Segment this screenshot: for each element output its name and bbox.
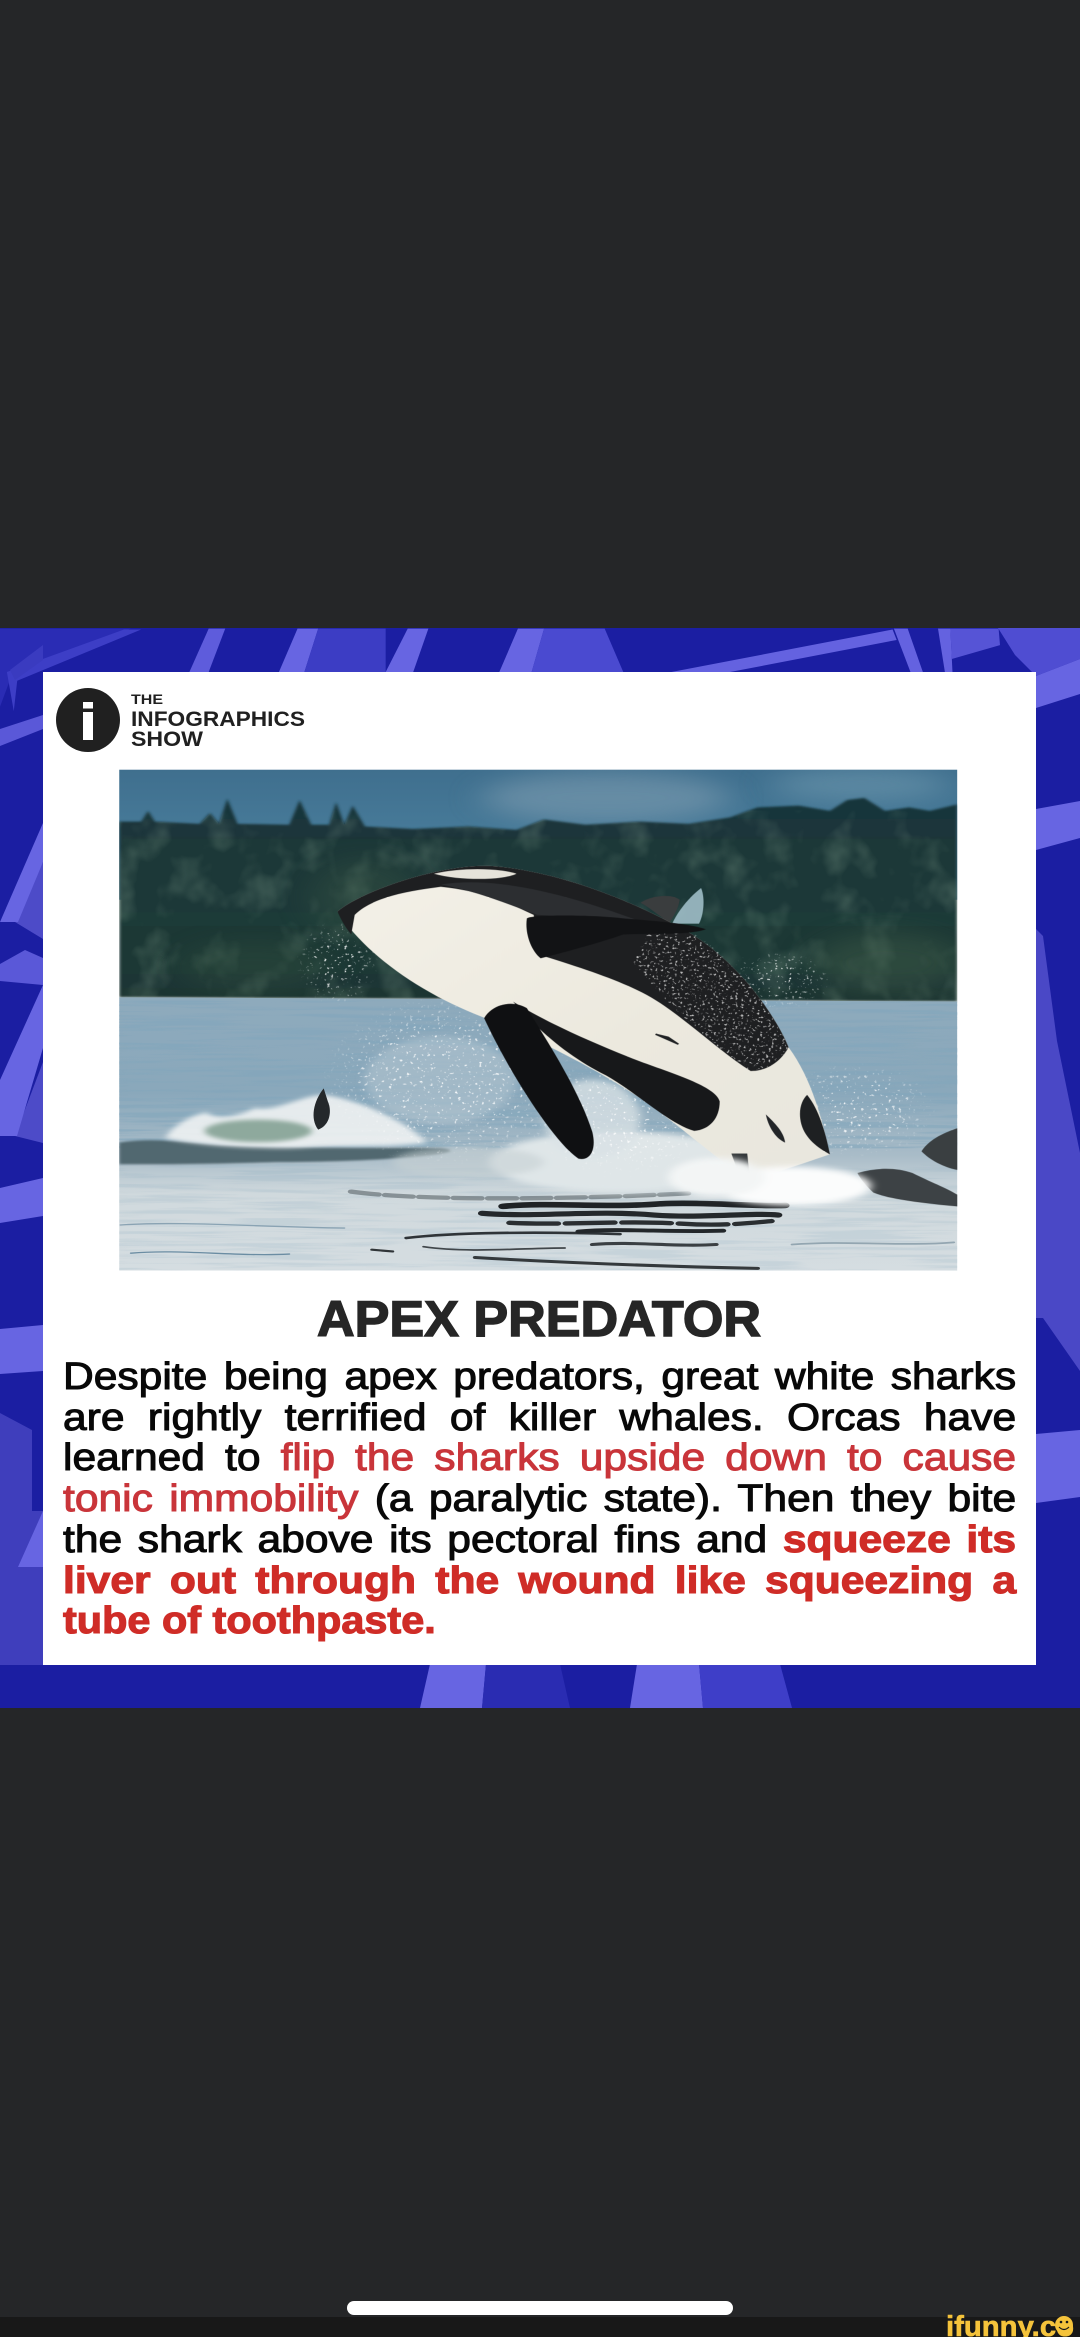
background band: blue geometric pattern	[0, 628, 1080, 1708]
right margin shapes	[998, 628, 1080, 676]
body text block: tonic immobility (a paralytic state). Then they bite	[63, 1478, 1016, 1520]
panel: white card	[43, 672, 1036, 1665]
logo: The Infographics Show	[56, 688, 305, 752]
logo: The Infographics Show: THE	[131, 692, 163, 707]
dorsal fin	[640, 896, 680, 923]
saddle grey shade	[443, 882, 634, 919]
blow spray at fin	[672, 888, 704, 924]
body text block: are rightly terrified of killer whales. Orcas have	[63, 1397, 1016, 1439]
saddle patch	[434, 869, 517, 879]
water reflections	[121, 1192, 954, 1268]
mist under the orca	[365, 1036, 751, 1192]
logo: The Infographics Show: SHOW	[131, 727, 204, 751]
bottom band shapes	[420, 1664, 486, 1708]
body text block: the shark above its pectoral fins and squeeze its	[63, 1519, 1016, 1561]
water spray droplets	[298, 923, 930, 1168]
heading: APEX PREDATOR: APEX PREDATOR	[317, 1291, 761, 1347]
bottom strip	[0, 2317, 1080, 2337]
belly black patch	[513, 1002, 720, 1131]
photo: orca breaching	[119, 767, 964, 1271]
background orca fins	[857, 1128, 957, 1206]
body white	[337, 866, 830, 1179]
left flipper	[484, 1004, 594, 1159]
body text block: tube of toothpaste.	[63, 1600, 436, 1642]
body text block: learned to flip the sharks upside down to cause	[63, 1437, 1016, 1479]
top dark area	[0, 0, 1080, 628]
home indicator bar	[347, 2301, 733, 2315]
orca	[337, 866, 830, 1179]
distant splash with second orca	[119, 1088, 451, 1164]
spray over back	[634, 933, 788, 1070]
black back and head	[337, 866, 789, 1071]
tail patches	[800, 1095, 830, 1154]
body text block: Despite being apex predators, great white sharks	[63, 1356, 1016, 1398]
body text block: liver out through the wound like squeezing a	[63, 1560, 1016, 1602]
body text block	[62, 1356, 1018, 1642]
pectoral fin raised	[526, 915, 706, 958]
logo: The Infographics Show: INFOGRAPHICS	[131, 707, 305, 731]
foam at the waterline	[668, 1158, 871, 1205]
scar mark	[656, 1034, 678, 1044]
left margin shapes	[0, 715, 43, 746]
photo background: sky, forest, water	[119, 767, 964, 1271]
